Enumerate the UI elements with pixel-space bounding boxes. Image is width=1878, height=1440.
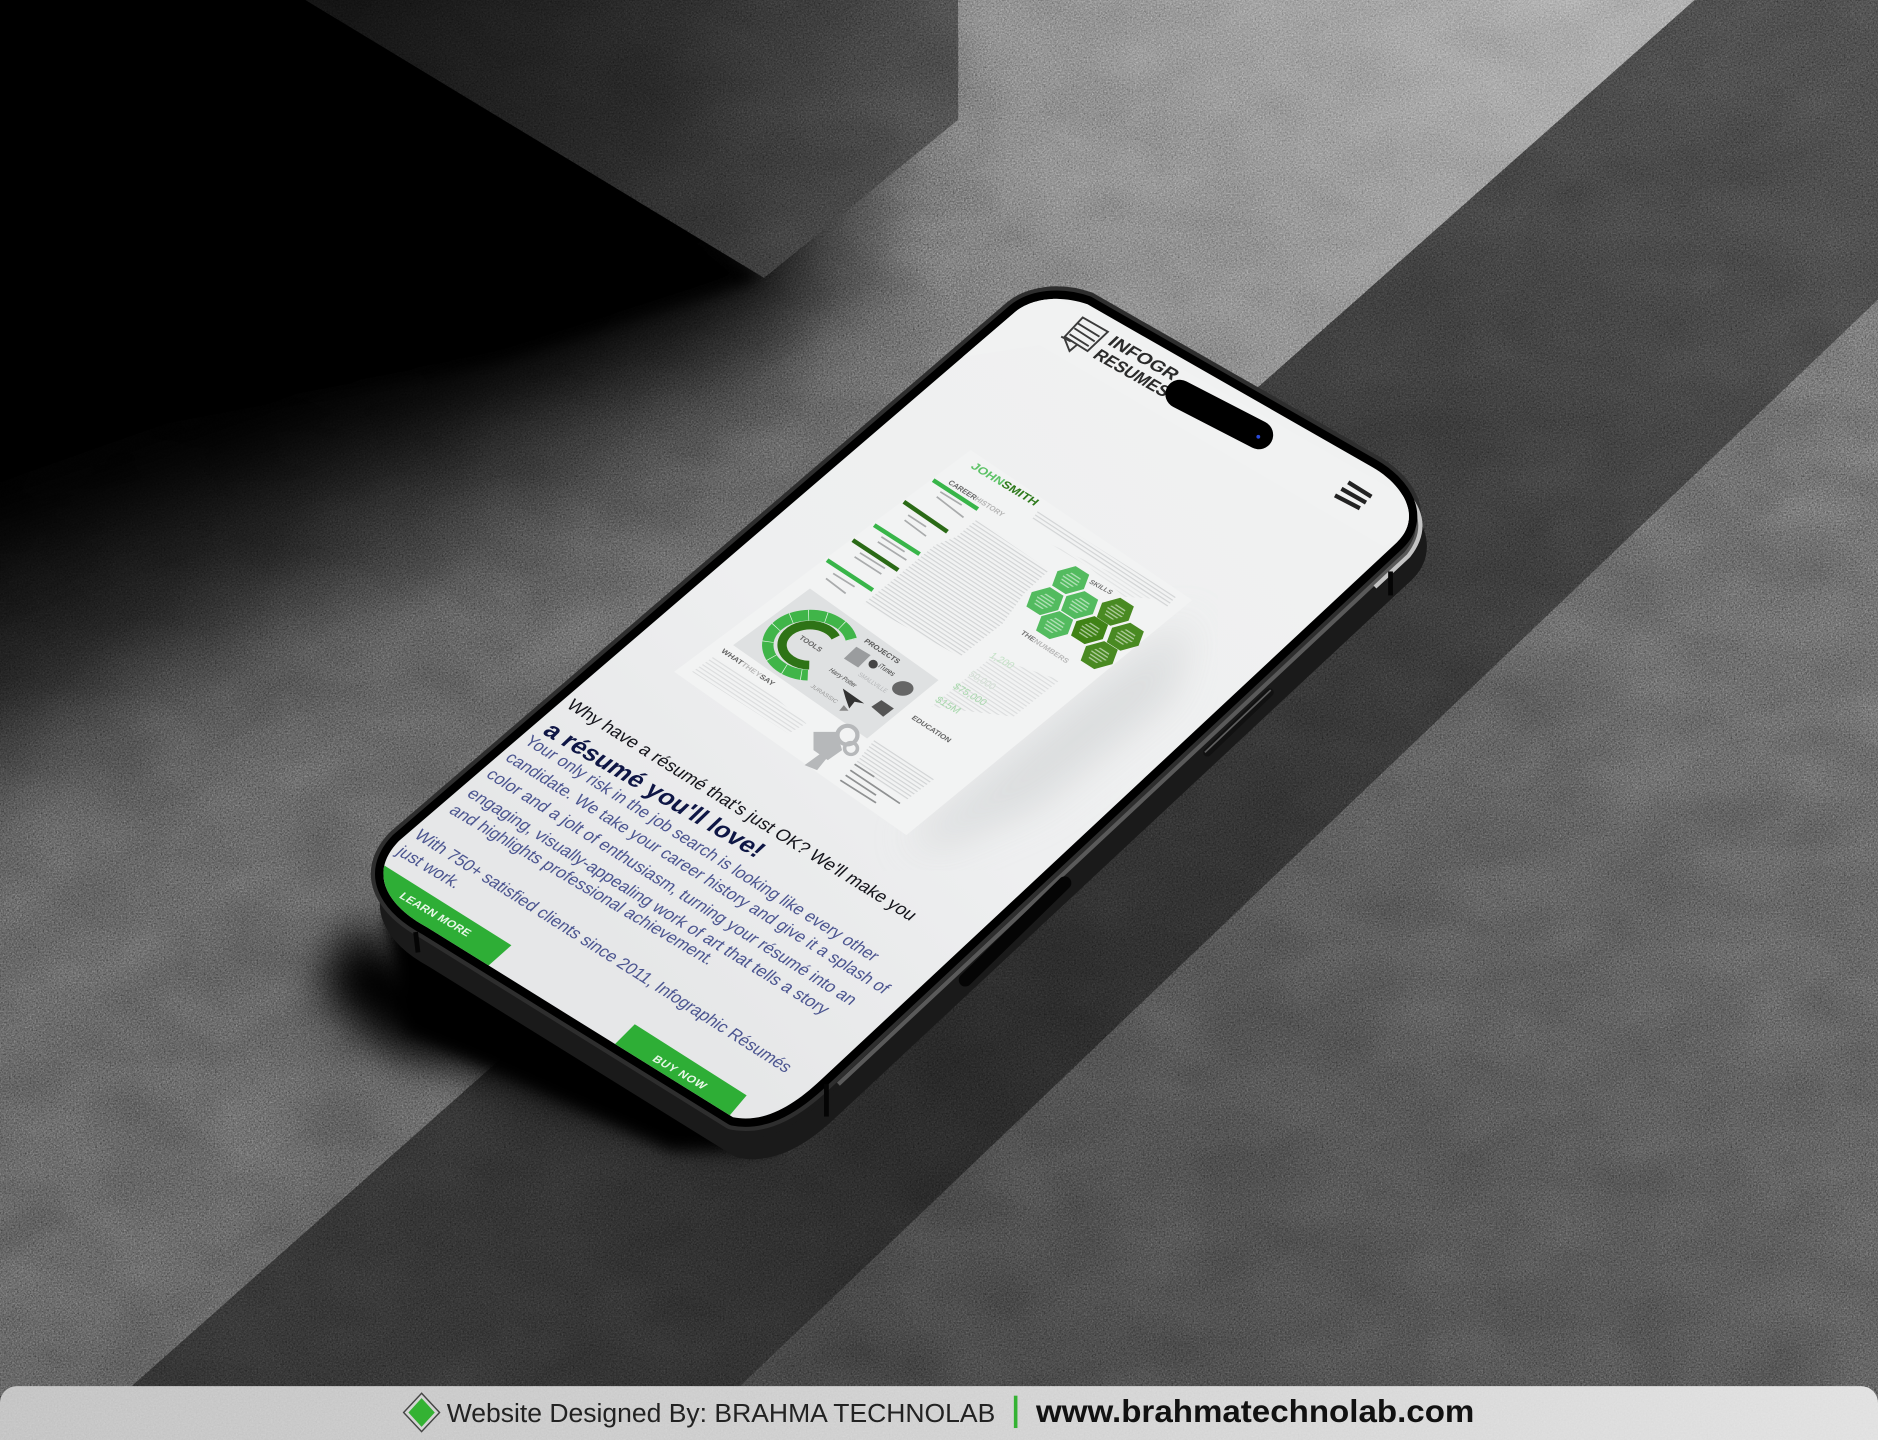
paragraph text: contact [840,764,900,803]
logo wordmarks: JURASSIC [809,684,839,705]
résumé document [692,463,1184,842]
timeline job text [826,492,964,593]
green divider [1014,1396,1017,1428]
antenna band left [416,932,418,952]
antenna band top right [1389,571,1393,595]
dynamic island [1180,394,1260,439]
document page [901,630,1156,834]
credit text: Website Designed By: BRAHMA TECHNOLAB [447,1398,995,1428]
paragraph text: career [864,520,1049,657]
body paragraph: color and a jolt of enthusiasm, turning your résumé into an [482,765,862,1009]
document shadow [934,639,1184,842]
logo wordmark: INFOGR [1104,333,1184,384]
document headings: SKILLS [1087,579,1114,596]
body paragraph: engaging, visually-appealing work of art that tells a story [463,784,834,1018]
screen background [383,298,1409,1118]
rim highlight right corner [1375,474,1420,587]
body paragraph: Your only risk in the job search is looking like every other [521,732,884,965]
document headings: CAREERHISTORY [946,479,1007,518]
document headings: THENUMBERS [1019,629,1071,665]
document headings: JOHNSMITH [968,461,1041,508]
document headings: WHATTHEYSAY [719,647,777,688]
logo wordmarks: SMALLVILLE [856,672,889,695]
paragraph text: testimonials [692,657,806,733]
header band [946,276,1437,546]
phone body side [391,329,1416,1148]
phone [370,286,1427,1159]
document headings [719,461,1114,744]
statistic numbers: $75,000 [950,682,989,708]
hamburger menu icon [1335,482,1371,508]
headline line 1: Why have a résumé that's just OK? We'll make you [562,695,922,924]
paragraph text: skills [1049,543,1171,600]
document headings: TOOLS [797,634,825,654]
paragraph text: numbers [931,657,1060,717]
statistic numbers: $15M [932,695,963,716]
tools panel [733,588,939,738]
timeline date bars [827,480,978,590]
website url: www.brahmatechnolab.com [1035,1394,1474,1429]
antenna band bottom right [824,1084,828,1117]
hexagon skills [1026,566,1144,669]
logo wordmarks: iTunes [876,662,898,678]
button: learn more [323,842,511,974]
document headings: PROJECTS [862,637,903,665]
body paragraph: and highlights professional achievement. [445,801,720,968]
background: cast shadow of block [0,0,862,910]
logo icon: résumé document [1061,317,1108,351]
button: buy now [605,1024,747,1129]
volume button [965,883,1065,980]
paragraph text: summary [1031,510,1176,607]
icon: green diamond [404,1393,440,1432]
screen [383,298,1409,1118]
second paragraph: just work. [392,842,467,892]
paragraph text: education [853,740,935,800]
second paragraph: With 750+ satisfied clients since 2011, Infographic Résumés [410,826,797,1076]
statistic numbers [932,651,1017,716]
phone metal rim [383,299,1409,1118]
background: lower floor [671,300,1878,1440]
headline line 2 bold: a résumé you'll love! [537,718,771,863]
logo wordmarks: Harry Potter [827,667,858,689]
statistic numbers: 50,000 [966,670,998,692]
button: learn more: LEARN MORE [396,891,474,939]
project logos [839,647,914,717]
logo wordmarks [809,662,898,705]
rim highlight right side [838,460,1418,1084]
footer credit bar [0,1386,1878,1440]
statistic numbers: 1,200 [986,651,1017,671]
document headings: EDUCATION [910,714,954,744]
movie camera graphic [805,726,857,770]
phone bezel [383,299,1409,1118]
phone cast shadow [317,910,779,1168]
tools donut chart [768,615,851,675]
side switch [1205,690,1271,752]
logo wordmark: RESUMES [1089,346,1175,400]
background: concrete block [305,0,958,278]
body paragraph: candidate. We take your career history and give it a splash of [501,748,895,998]
button: buy now: BUY NOW [649,1054,709,1092]
